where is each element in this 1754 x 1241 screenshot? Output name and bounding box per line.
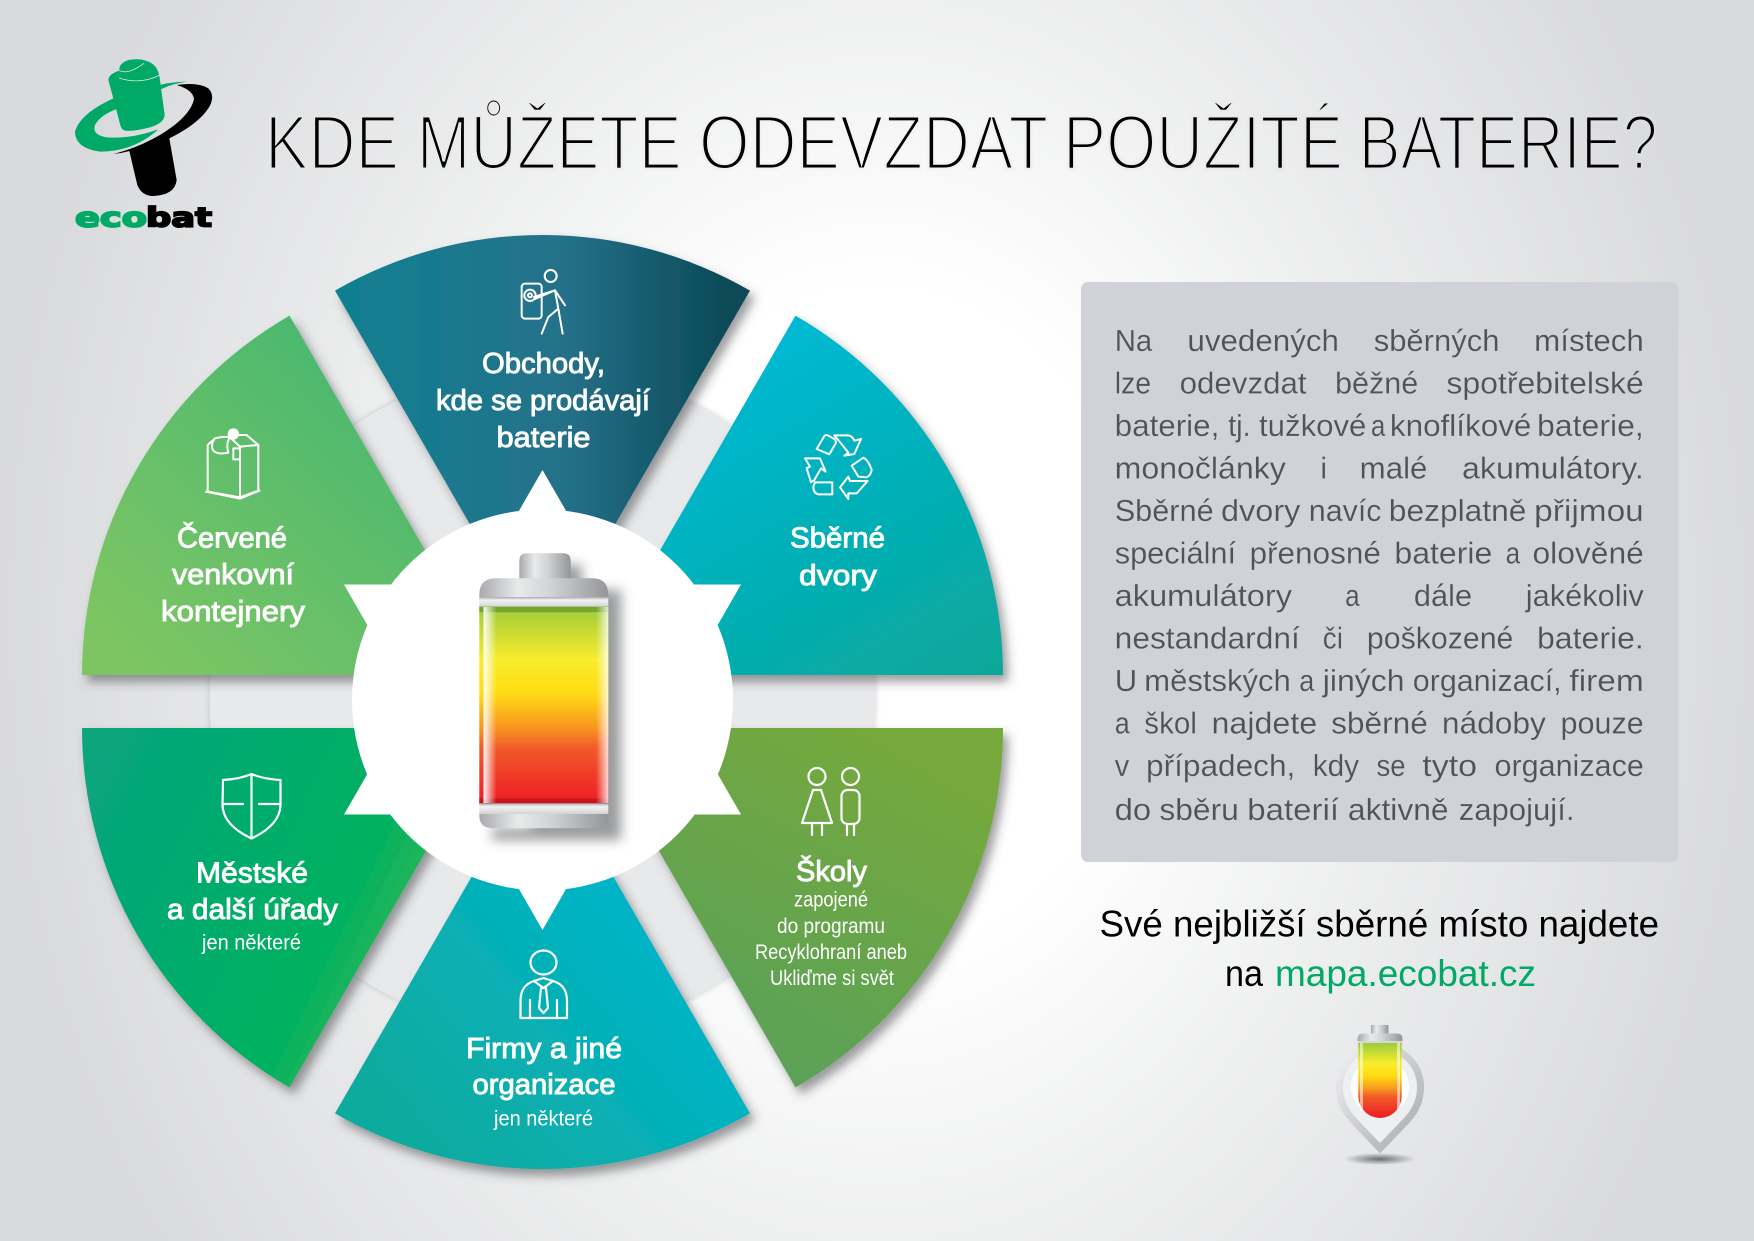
label: Firmy a jiné — [466, 1033, 622, 1065]
label: Recyklohraní aneb — [755, 941, 907, 964]
body text: olověné — [1532, 536, 1644, 570]
body text: akumulátory. — [1462, 450, 1644, 486]
icon: person at door — [522, 270, 565, 334]
label: do programu — [777, 915, 885, 938]
body text: do — [1115, 792, 1151, 827]
title: BATERIE? — [1359, 100, 1658, 186]
body text: najdete — [1212, 706, 1317, 740]
label — [755, 854, 907, 990]
label: dvory — [799, 560, 878, 592]
body text: škol — [1144, 706, 1197, 740]
body text: speciální — [1115, 536, 1236, 570]
body text: přenosné — [1250, 536, 1381, 570]
body text: malé — [1360, 450, 1427, 486]
body text: jiných — [1322, 663, 1404, 698]
body text: jakékoliv — [1525, 578, 1644, 613]
label: a další úřady — [167, 894, 339, 926]
body text: navíc — [1309, 493, 1382, 528]
panel: Firmy a jiné organizace — [335, 754, 750, 1169]
panel: Školy — [588, 728, 1003, 1087]
label: venkovní — [172, 559, 294, 591]
body text: běžné — [1335, 366, 1418, 400]
body text: Sběrné — [1115, 493, 1214, 528]
body text: a — [1299, 663, 1315, 698]
body text: místech — [1534, 323, 1644, 358]
label: jen některé — [493, 1108, 593, 1130]
body text: Na — [1115, 323, 1153, 358]
logo: ecobat — [75, 59, 212, 234]
label: Červené — [177, 520, 287, 554]
label — [167, 858, 339, 954]
panel: Obchody, kde se prodávají baterie — [335, 235, 750, 650]
icon: location pin with battery — [1336, 1025, 1424, 1165]
icon: shield — [222, 774, 280, 838]
body text: pouze — [1560, 706, 1644, 740]
body text: baterie — [1394, 536, 1492, 570]
body text: U — [1115, 663, 1137, 698]
call to action text — [1100, 904, 1659, 994]
label — [436, 348, 650, 454]
body text — [1115, 323, 1644, 827]
title: ODEVZDAT — [699, 100, 1047, 186]
body text: tyto — [1422, 748, 1477, 783]
label: kde se prodávají — [436, 385, 650, 417]
call to action text: Své nejbližší sběrné místo najdete — [1100, 904, 1659, 944]
icon: children — [802, 768, 860, 835]
panel: info text — [1081, 282, 1678, 862]
label: Obchody, — [482, 348, 605, 380]
panel: Sběrné dvory — [588, 316, 1003, 675]
body text: baterie. — [1537, 620, 1644, 656]
label — [466, 1033, 622, 1130]
body text: organizací, — [1413, 663, 1562, 698]
body text: knoflíkové — [1390, 408, 1531, 443]
body text: bezplatně — [1389, 493, 1526, 528]
body text: v — [1115, 748, 1130, 783]
icon: recycle — [805, 435, 872, 499]
logo: ecobat: eco — [75, 202, 147, 234]
body text: a — [1506, 536, 1521, 570]
label: Sběrné — [790, 522, 885, 554]
body text: firem — [1569, 663, 1644, 698]
label: zapojené — [794, 888, 868, 912]
body text: sběru — [1159, 792, 1239, 827]
body text: lze — [1115, 366, 1151, 400]
body text: uvedených — [1187, 323, 1339, 358]
label — [161, 520, 306, 628]
body text: aktivně — [1348, 792, 1449, 827]
body text: dále — [1414, 578, 1472, 613]
body text: a — [1371, 408, 1386, 443]
label: Školy — [796, 854, 867, 888]
body text: dvory — [1221, 493, 1301, 528]
label: kontejnery — [161, 596, 306, 628]
label: baterie — [496, 422, 590, 454]
body text: nestandardní — [1115, 620, 1300, 656]
background ring behind wheel — [210, 367, 876, 1033]
body text: baterie, — [1537, 408, 1644, 443]
body text: či — [1323, 620, 1343, 656]
label: organizace — [472, 1069, 616, 1101]
body text: se — [1376, 748, 1406, 783]
title: KDE — [265, 100, 399, 186]
body text: případech, — [1146, 748, 1295, 783]
label: Ukliďme si svět — [770, 967, 894, 990]
body text: organizace — [1494, 748, 1644, 783]
body text: kdy — [1313, 748, 1360, 783]
body text: poškozené — [1367, 620, 1513, 656]
call to action text: mapa.ecobat.cz — [1275, 953, 1536, 994]
body text: nádoby — [1442, 706, 1546, 740]
body text: odevzdat — [1180, 366, 1307, 400]
body text: sběrné — [1331, 706, 1428, 740]
body text: městských — [1144, 663, 1291, 698]
title: MŮŽETE — [417, 97, 682, 186]
body text: zapojují. — [1459, 792, 1574, 827]
label — [790, 522, 885, 592]
body text: a — [1115, 706, 1130, 740]
body text: i — [1320, 450, 1327, 486]
panel: Červené venkovní kontejnery — [82, 316, 497, 675]
icon: central battery — [479, 553, 621, 840]
logo: ecobat: bat — [146, 202, 212, 234]
body text: baterie, — [1115, 408, 1219, 443]
body text: tj. — [1228, 408, 1251, 443]
body text: spotřebitelské — [1446, 366, 1644, 400]
body text: sběrných — [1374, 323, 1500, 358]
white star centre — [344, 470, 741, 930]
label: jen některé — [201, 932, 301, 954]
icon: container — [206, 429, 259, 499]
title: POUŽITÉ — [1063, 100, 1343, 186]
body text: monočlánky — [1115, 450, 1286, 486]
icon: businessman — [520, 950, 567, 1018]
call to action text: na — [1225, 953, 1263, 994]
body text: tužkové — [1259, 408, 1366, 443]
body text: přijmou — [1534, 493, 1644, 528]
panel: Městské a další úřady — [82, 728, 497, 1087]
body text: a — [1345, 578, 1360, 613]
label: Městské — [196, 858, 308, 890]
body text: baterií — [1247, 792, 1339, 827]
body text: akumulátory — [1115, 578, 1293, 613]
